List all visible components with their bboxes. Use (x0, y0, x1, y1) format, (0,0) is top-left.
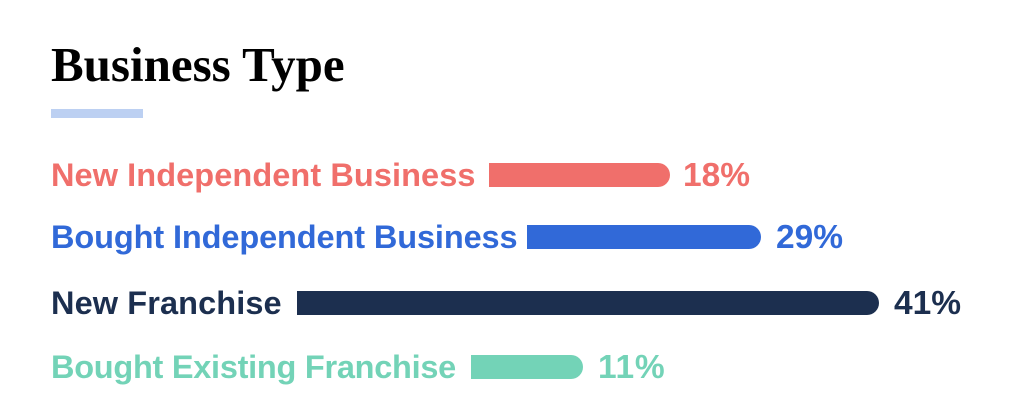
row: New Independent Business: New Independent Business (51, 157, 476, 193)
row: New Franchise: New Franchise (51, 285, 282, 321)
row: Bought Existing Franchise (51, 349, 665, 386)
row: New Franchise: 41% (894, 285, 961, 322)
row: Bought Existing Franchise: 11% (598, 349, 665, 386)
row: Bought Independent Business (51, 219, 843, 256)
title underline accent (51, 109, 143, 118)
title: Business Type (51, 37, 345, 92)
row: Bought Independent Business: Bought Independent Business (51, 219, 518, 255)
row: Bought Independent Business: 29% (776, 219, 843, 256)
row: New Franchise (51, 285, 961, 322)
row: New Independent Business: 18% (683, 157, 750, 194)
row: New Independent Business (51, 157, 750, 194)
row: Bought Existing Franchise: Bought Existing Franchise (51, 349, 456, 385)
